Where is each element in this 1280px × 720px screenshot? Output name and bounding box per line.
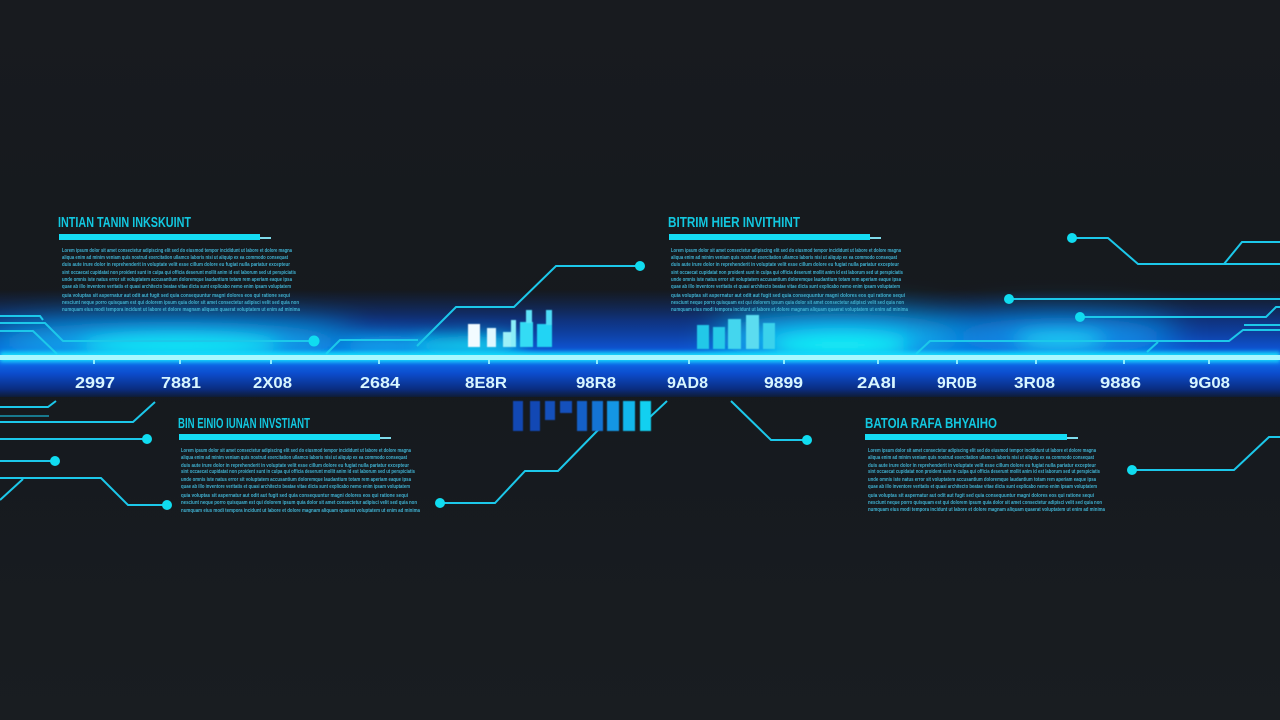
panel: upper left text block (58, 214, 300, 313)
timeline ticks and year labels: 2684 (360, 375, 400, 392)
body text: unde omnis iste natus error sit voluptatem accusantium doloremque laudantium totam rem aperiam eaque ipsa (62, 277, 292, 283)
timeline ticks and year labels (75, 360, 1230, 392)
panel: lower left text block (178, 415, 420, 514)
panel: upper right text block (668, 214, 908, 313)
timeline ticks and year labels: 8E8R (465, 375, 507, 392)
body text: numquam eius modi tempora incidunt ut labore et dolore magnam aliquam quaerat voluptatem ut enim ad minima (671, 307, 908, 313)
body text: quae ab illo inventore veritatis et quasi architecto beatae vitae dicta sunt explicabo nemo enim ipsam voluptatem (868, 484, 1097, 490)
timeline band (0, 358, 1280, 397)
body text: nesciunt neque porro quisquam est qui dolorem ipsum quia dolor sit amet consectetur adipisci velit sed quia non (868, 500, 1102, 506)
body text: unde omnis iste natus error sit voluptatem accusantium doloremque laudantium totam rem aperiam eaque ipsa (181, 477, 411, 483)
body text: quia voluptas sit aspernatur aut odit aut fugit sed quia consequuntur magni dolores eos qui ratione sequi (868, 493, 1095, 499)
body text: sint occaecat cupidatat non proident sunt in culpa qui officia deserunt mollit anim id est laborum sed ut perspiciatis (62, 270, 296, 276)
body text (868, 448, 1105, 513)
body text: aliqua enim ad minim veniam quis nostrud exercitation ullamco laboris nisi ut aliquip ex ea commodo consequat (671, 255, 897, 261)
body text: duis aute irure dolor in reprehenderit in voluptate velit esse cillum dolore eu fugiat nulla pariatur excepteur (181, 463, 409, 469)
body text: numquam eius modi tempora incidunt ut labore et dolore magnam aliquam quaerat voluptatem ut enim ad minima (181, 508, 420, 514)
heading bar (59, 234, 271, 240)
body text (181, 448, 420, 514)
timeline glow (0, 290, 1280, 362)
body text: quae ab illo inventore veritatis et quasi architecto beatae vitae dicta sunt explicabo nemo enim ipsam voluptatem (671, 284, 900, 290)
body text: aliqua enim ad minim veniam quis nostrud exercitation ullamco laboris nisi ut aliquip ex ea commodo consequat (868, 455, 1094, 461)
timeline ticks and year labels: 9886 (1100, 375, 1141, 392)
main timeline line (0, 352, 1280, 362)
circuit node dots (50, 233, 1137, 510)
bar chart: upper left (468, 310, 552, 347)
body text: Lorem ipsum dolor sit amet consectetur adipiscing elit sed do eiusmod tempor incididunt ut labore et dolore magna (868, 448, 1096, 454)
bar chart: lower centre (513, 401, 651, 431)
timeline ticks and year labels: 2A8I (857, 375, 896, 392)
timeline ticks and year labels: 9G08 (1189, 375, 1230, 392)
heading: INTIAN TANIN INKSKUINT (58, 214, 191, 231)
body text: quia voluptas sit aspernatur aut odit aut fugit sed quia consequuntur magni dolores eos qui ratione sequi (62, 293, 291, 299)
body text: aliqua enim ad minim veniam quis nostrud exercitation ullamco laboris nisi ut aliquip ex ea commodo consequat (181, 455, 407, 461)
timeline ticks and year labels: 3R08 (1014, 375, 1055, 392)
body text: sint occaecat cupidatat non proident sunt in culpa qui officia deserunt mollit anim id est laborum sed ut perspiciatis (671, 270, 903, 276)
body text: nesciunt neque porro quisquam est qui dolorem ipsum quia dolor sit amet consectetur adipisci velit sed quia non (671, 300, 904, 306)
circuit lines (0, 238, 1280, 505)
body text: aliqua enim ad minim veniam quis nostrud exercitation ullamco laboris nisi ut aliquip ex ea commodo consequat (62, 255, 288, 261)
body text: Lorem ipsum dolor sit amet consectetur adipiscing elit sed do eiusmod tempor incididunt ut labore et dolore magna (62, 248, 292, 254)
body text: sint occaecat cupidatat non proident sunt in culpa qui officia deserunt mollit anim id est laborum sed ut perspiciatis (868, 469, 1100, 475)
body text: duis aute irure dolor in reprehenderit in voluptate velit esse cillum dolore eu fugiat nulla pariatur excepteur (62, 262, 290, 268)
body text: duis aute irure dolor in reprehenderit in voluptate velit esse cillum dolore eu fugiat nulla pariatur excepteur (868, 463, 1096, 469)
heading: BIN EINIO IUNAN INVSTIANT (178, 415, 310, 432)
timeline ticks and year labels: 9899 (764, 375, 803, 392)
timeline ticks and year labels: 2997 (75, 375, 115, 392)
body text (671, 248, 908, 313)
heading: BITRIM HIER INVITHINT (668, 214, 800, 231)
body text: quia voluptas sit aspernatur aut odit aut fugit sed quia consequuntur magni dolores eos qui ratione sequi (181, 493, 409, 499)
body text: Lorem ipsum dolor sit amet consectetur adipiscing elit sed do eiusmod tempor incididunt ut labore et dolore magna (671, 248, 901, 254)
body text: quae ab illo inventore veritatis et quasi architecto beatae vitae dicta sunt explicabo nemo enim ipsam voluptatem (181, 484, 410, 490)
body text: nesciunt neque porro quisquam est qui dolorem ipsum quia dolor sit amet consectetur adipisci velit sed quia non (181, 500, 417, 506)
timeline ticks and year labels: 7881 (161, 375, 201, 392)
body text: Lorem ipsum dolor sit amet consectetur adipiscing elit sed do eiusmod tempor incididunt ut labore et dolore magna (181, 448, 411, 454)
body text: numquam eius modi tempora incidunt ut labore et dolore magnam aliquam quaerat voluptatem ut enim ad minima (62, 307, 300, 313)
timeline ticks and year labels: 98R8 (576, 375, 616, 392)
body text: quia voluptas sit aspernatur aut odit aut fugit sed quia consequuntur magni dolores eos qui ratione sequi (671, 293, 906, 299)
timeline ticks and year labels: 9AD8 (667, 375, 708, 392)
heading bar (865, 434, 1078, 440)
body text: unde omnis iste natus error sit voluptatem accusantium doloremque laudantium totam rem aperiam eaque ipsa (671, 277, 901, 283)
body text: numquam eius modi tempora incidunt ut labore et dolore magnam aliquam quaerat voluptatem ut enim ad minima (868, 507, 1105, 513)
body text: sint occaecat cupidatat non proident sunt in culpa qui officia deserunt mollit anim id est laborum sed ut perspiciatis (181, 469, 415, 475)
body text: duis aute irure dolor in reprehenderit in voluptate velit esse cillum dolore eu fugiat nulla pariatur excepteur (671, 262, 899, 268)
timeline ticks and year labels: 9R0B (937, 375, 977, 392)
body text: nesciunt neque porro quisquam est qui dolorem ipsum quia dolor sit amet consectetur adipisci velit sed quia non (62, 300, 299, 306)
body text: unde omnis iste natus error sit voluptatem accusantium doloremque laudantium totam rem aperiam eaque ipsa (868, 477, 1096, 483)
body text: quae ab illo inventore veritatis et quasi architecto beatae vitae dicta sunt explicabo nemo enim ipsam voluptatem (62, 284, 291, 290)
body text (62, 248, 300, 313)
heading bar (669, 234, 881, 240)
bar chart: upper right (697, 315, 775, 349)
heading bar (179, 434, 391, 440)
panel: lower right text block (865, 415, 1105, 513)
timeline ticks and year labels: 2X08 (253, 375, 292, 392)
heading: BATOIA RAFA BHYAIHO (865, 415, 997, 432)
